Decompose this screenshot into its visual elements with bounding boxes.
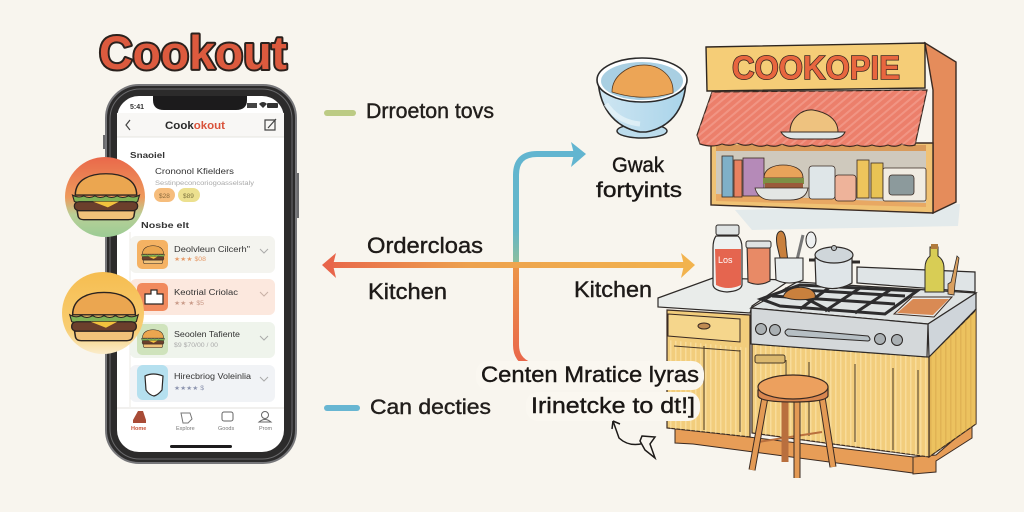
label: bowl caption: fortyints — [596, 179, 682, 202]
callout note: Irinetcke to dt!] — [531, 393, 695, 418]
note halo — [476, 361, 704, 421]
legend: blue: Can decties — [370, 396, 491, 419]
phone frame — [106, 85, 296, 463]
featured section — [130, 151, 255, 230]
shelf top board — [716, 145, 926, 151]
icon: curly arrow — [612, 421, 655, 458]
cabinet front left — [667, 310, 750, 437]
burner grates — [761, 285, 917, 314]
shelf side panel — [925, 43, 956, 213]
stool — [752, 375, 833, 478]
label: bowl caption: Gwak — [612, 154, 664, 177]
utensils — [775, 231, 816, 283]
pot — [809, 246, 860, 289]
sign text: COOKOPIE — [732, 49, 900, 86]
right side texture — [929, 310, 976, 457]
oil bottle and knife — [925, 244, 959, 295]
icon: bowl with bun — [597, 58, 687, 138]
featured section: Sestinpeconcoriogoasselstaly — [155, 180, 255, 187]
list card 2: ★★ ★ $5 — [174, 300, 205, 307]
phone screen — [117, 96, 284, 452]
shadow — [735, 204, 960, 230]
legend: blue — [324, 396, 491, 419]
cabinet panel lines — [755, 355, 918, 454]
kitchen illustration — [658, 225, 976, 478]
frame highlight — [110, 89, 292, 459]
phone mockup — [103, 85, 299, 463]
stove right side — [928, 293, 976, 357]
callout note — [476, 361, 704, 458]
list card 1: ★★★ $08 — [174, 256, 207, 263]
shop shelf illustration — [697, 43, 960, 230]
shelf box — [711, 143, 933, 213]
legend: green: Drroeton tovs — [366, 100, 494, 123]
drawer — [668, 314, 740, 432]
status bar: 5:41 — [130, 104, 144, 111]
knobs — [756, 324, 902, 346]
list divider rail — [129, 232, 131, 407]
list card 4: ★★★★ $ — [174, 385, 205, 392]
stove front — [751, 308, 928, 357]
list card 1: Deolvleun Cilcerh" — [174, 245, 250, 254]
awning — [697, 90, 927, 146]
side buttons — [103, 135, 299, 218]
list card 4 — [130, 365, 275, 402]
shelf interior — [716, 150, 926, 203]
shelf burger — [755, 165, 808, 200]
tab bar: Prom — [259, 426, 273, 432]
label: kitchen left: Kitchen — [368, 279, 447, 304]
label: bowl caption — [596, 154, 682, 202]
note text: Centen Mratice lyras — [481, 362, 699, 387]
burger badge bottom — [62, 272, 144, 354]
bread on stove — [783, 287, 815, 300]
featured section: Nosbe elt — [141, 221, 189, 230]
app header: Cookokout — [165, 120, 225, 132]
books — [722, 156, 883, 198]
list card 3: Seoolen Tafiente — [174, 330, 241, 339]
griddle tray — [894, 297, 952, 317]
tab bar — [117, 408, 284, 432]
microwave — [883, 168, 926, 201]
list card 2: Keotrial Criolac — [174, 288, 238, 297]
featured section: $89 — [183, 193, 194, 200]
tab bar: Explore — [176, 426, 195, 432]
cabinet plinth — [675, 424, 972, 474]
status bar — [130, 102, 278, 111]
list card 4: Hirecbriog Voleinlia — [174, 372, 252, 381]
featured section: Snaoiel — [130, 151, 165, 160]
oven handle — [785, 329, 870, 341]
cabinet right side — [929, 310, 976, 457]
featured section: $28 — [159, 193, 170, 200]
jars — [713, 225, 771, 292]
arrow: blue up to bowl — [516, 142, 586, 265]
cabinet front right — [752, 344, 929, 457]
bread on plate — [781, 110, 845, 139]
left front texture — [667, 340, 750, 437]
tab bar: Home — [131, 426, 146, 432]
arrow: red down to note — [516, 265, 530, 365]
arrow: horizontal two-way — [322, 253, 695, 278]
title: Cookout — [99, 26, 287, 79]
home indicator — [170, 445, 232, 448]
sign board — [706, 43, 925, 91]
list card 1 — [130, 236, 275, 273]
awning hatching — [697, 90, 927, 145]
notch — [153, 96, 247, 110]
shelf board — [716, 194, 926, 207]
label: orders: Ordercloas — [367, 233, 483, 258]
list card 3 — [130, 322, 275, 358]
tab bar: Goods — [218, 426, 234, 432]
stove top — [751, 282, 976, 324]
label: kitchen right: Kitchen — [574, 277, 652, 302]
burger badge top — [65, 157, 145, 237]
jars: Los — [718, 255, 733, 265]
list card 3: $9 $70/00 / 00 — [174, 343, 219, 349]
featured section: Crononol Kfielders — [155, 166, 234, 176]
countertop — [658, 278, 790, 313]
front texture — [752, 344, 929, 457]
app header — [117, 113, 284, 137]
jars — [809, 166, 856, 201]
flow arrows — [322, 142, 695, 365]
backsplash — [857, 267, 975, 292]
list card 2 — [130, 279, 275, 315]
